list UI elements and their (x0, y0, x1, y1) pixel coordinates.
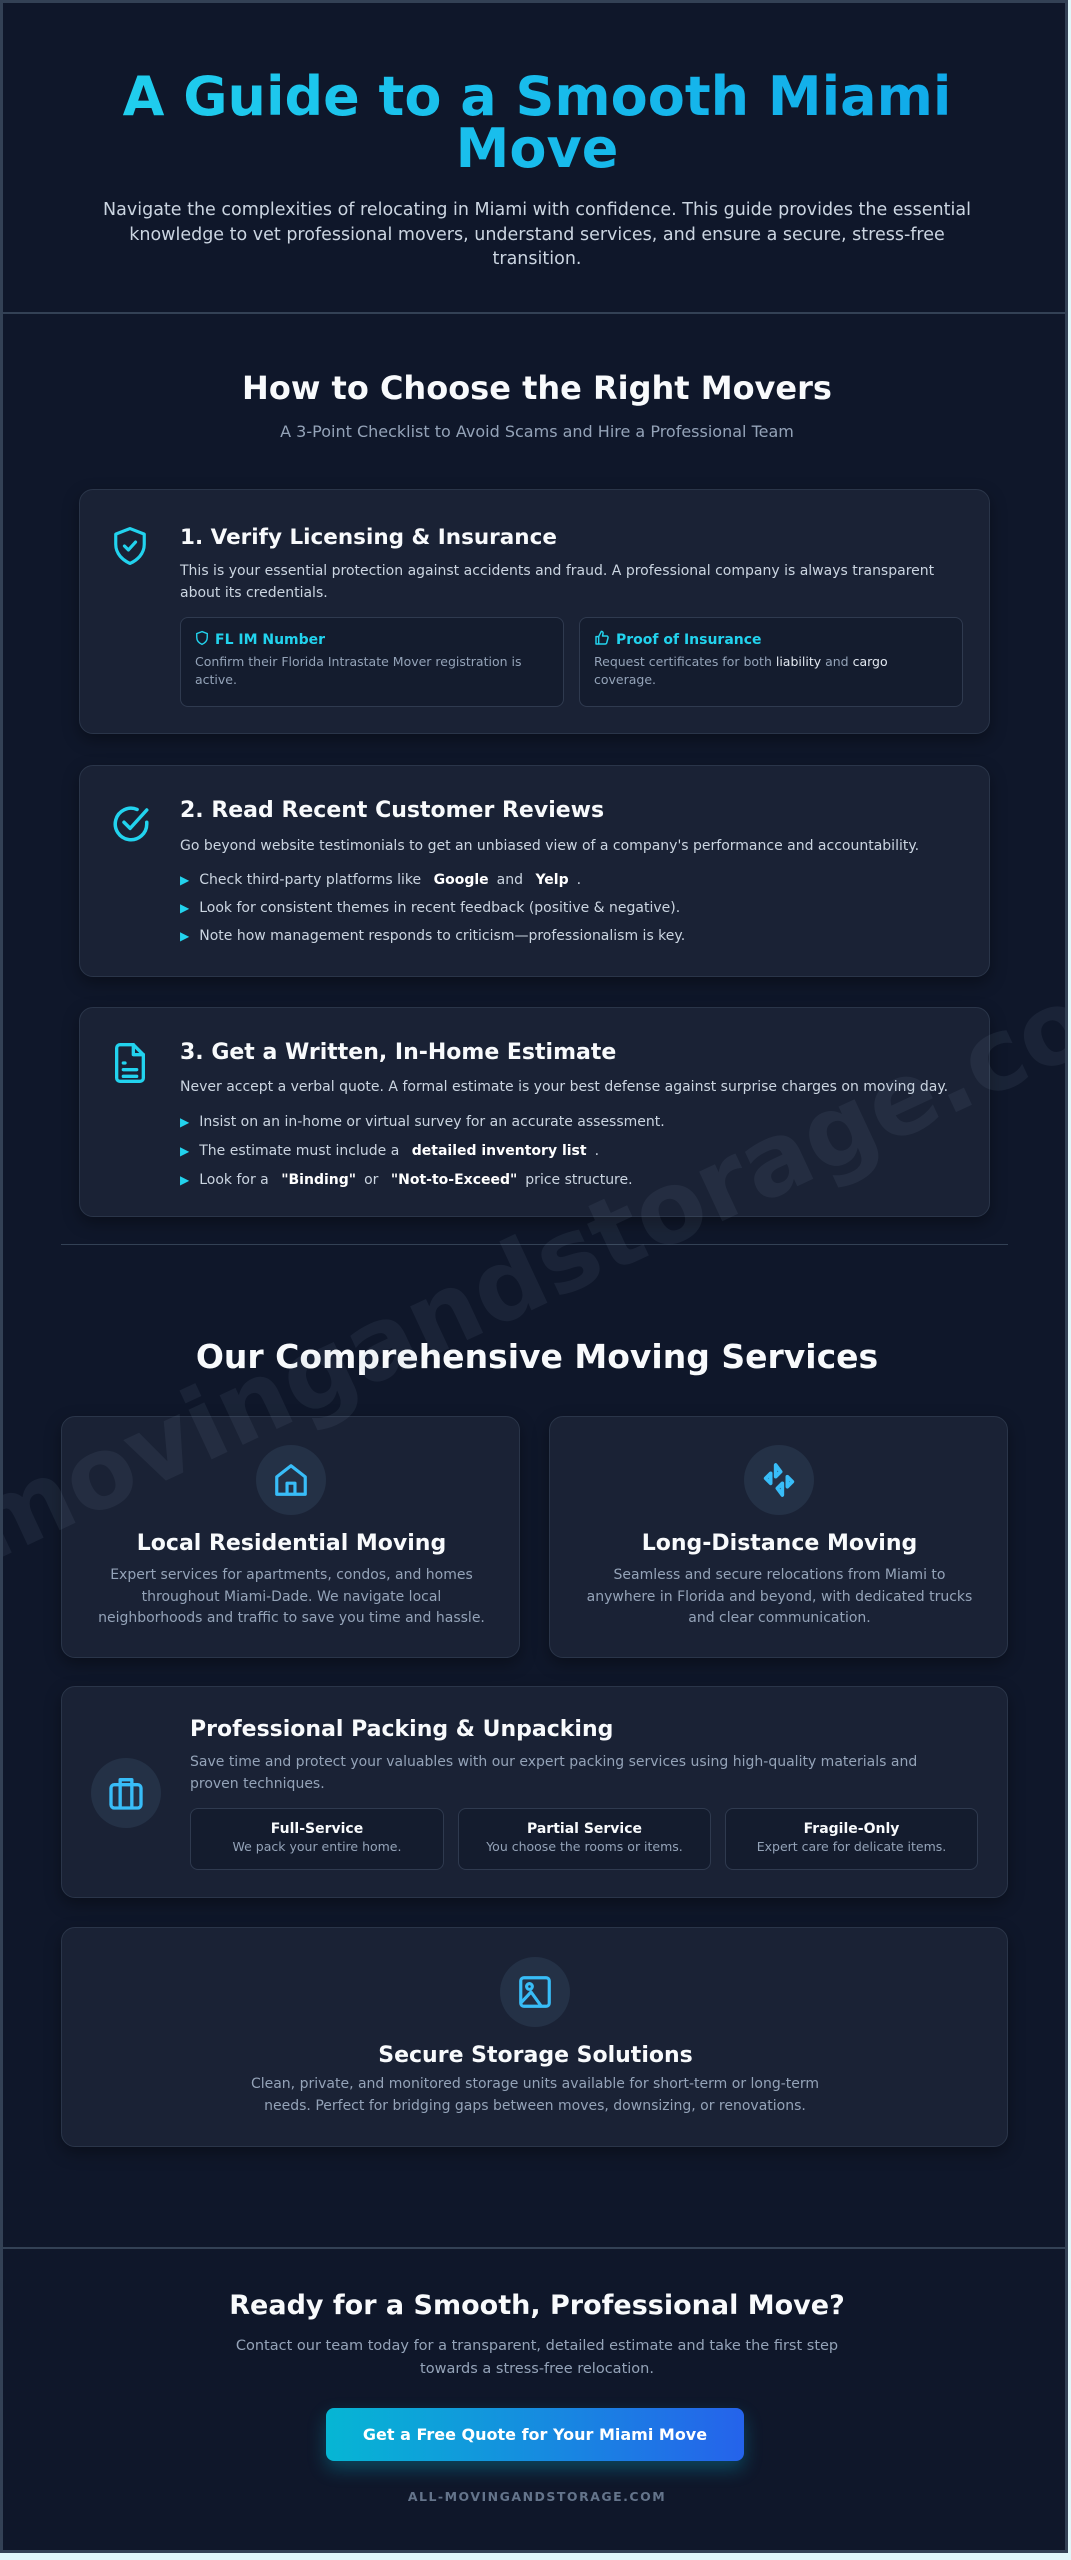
option: full-service (190, 1808, 444, 1870)
panel: step 2 reviews (79, 765, 990, 977)
footer description: Contact our team today for a transparent, detailed estimate and take the first step towards a stress-free relocation. (236, 2338, 838, 2377)
description: Go beyond website testimonials to get an unbiased view of a company's performance and accountability. (180, 838, 919, 854)
icon: document (115, 1043, 145, 1083)
description: Save time and protect your valuables with our expert packing services using high-quality materials and proven techniques. (190, 1754, 917, 1792)
bullet list (180, 1114, 665, 1188)
section subtitle: A 3-Point Checklist to Avoid Scams and Hire a Professional Team (280, 422, 794, 441)
sub-card: FL IM number: FL IM Number (215, 632, 325, 648)
description: Seamless and secure relocations from Miami to anywhere in Florida and beyond, with dedicated trucks and clear communication. (587, 1567, 972, 1626)
bullet list: ▶ The estimate must include a detailed inventory list . (180, 1143, 599, 1159)
CTA button: Get a Free Quote for Your Miami Move (363, 2425, 707, 2444)
icon: circle check (113, 806, 149, 842)
heading: 3. Get a Written, In-Home Estimate (180, 1040, 616, 1065)
header title (3, 71, 1071, 175)
panel: local residential moving (61, 1416, 520, 1658)
sub-card: proof of insurance (579, 617, 963, 707)
icon: image (500, 1957, 570, 2027)
bullet list (180, 872, 685, 944)
option: fragile-only: Fragile-Only (804, 1821, 899, 1837)
panel: long-distance moving (549, 1416, 1008, 1658)
sub-card: FL IM number: Confirm their Florida Intrastate Mover registration is active. (195, 654, 522, 687)
bullet list: ▶ Look for a "Binding" or "Not-to-Exceed" price structure. (180, 1172, 633, 1188)
bullet list: ▶ Insist on an in-home or virtual survey for an accurate assessment. (180, 1114, 665, 1130)
icon: briefcase (91, 1758, 161, 1828)
footer website: ALL-MOVINGANDSTORAGE.COM (408, 2489, 666, 2504)
option: partial service: You choose the rooms or items. (486, 1839, 683, 1854)
sub-card: FL IM number (180, 617, 564, 707)
panel: step 1 licensing (79, 489, 990, 734)
title: Secure Storage Solutions (378, 2043, 693, 2068)
panel: packing & unpacking (61, 1686, 1008, 1898)
section heading: services: Our Comprehensive Moving Services (196, 1337, 878, 1376)
description: Never accept a verbal quote. A formal estimate is your best defense against surprise charges on moving day. (180, 1079, 948, 1095)
description: Clean, private, and monitored storage units available for short-term or long-term needs. Perfect for bridging gaps between moves, downsizing, or renovations. (251, 2076, 819, 2114)
option: partial service: Partial Service (527, 1821, 642, 1837)
header title: A Guide to a Smooth Miami (123, 65, 951, 128)
icon: shield check (114, 527, 146, 565)
panel: step 3 estimate (79, 1007, 990, 1217)
header subtitle: Navigate the complexities of relocating in Miami with confidence. This guide provides the essential knowledge to vet professional movers, understand services, and ensure a secure, stress-free transition. (103, 200, 971, 269)
option: full-service: We pack your entire home. (232, 1839, 401, 1854)
sub-card: proof of insurance: Proof of Insurance (616, 632, 762, 648)
description: This is your essential protection against accidents and fraud. A professional company is always transparent about its credentials. (180, 563, 934, 601)
option: fragile-only (725, 1808, 978, 1870)
bullet list: ▶ Check third-party platforms like Google and Yelp . (180, 872, 581, 888)
CTA button (326, 2408, 744, 2461)
option: partial service (458, 1808, 711, 1870)
title: Long-Distance Moving (642, 1531, 917, 1556)
heading: 1. Verify Licensing & Insurance (180, 525, 557, 550)
icon: arrows (744, 1445, 814, 1515)
title: Professional Packing & Unpacking (190, 1717, 613, 1742)
bullet list: ▶ Note how management responds to criticism—professionalism is key. (180, 928, 685, 944)
description: Expert services for apartments, condos, and homes throughout Miami-Dade. We navigate local neighborhoods and traffic to save you time and hassle. (98, 1567, 485, 1626)
bullet list: ▶ Look for consistent themes in recent feedback (positive & negative). (180, 900, 680, 916)
option: full-service: Full-Service (271, 1821, 363, 1837)
panel: secure storage (61, 1927, 1008, 2147)
footer heading: Ready for a Smooth, Professional Move? (229, 2290, 845, 2321)
heading: 2. Read Recent Customer Reviews (180, 798, 604, 823)
sub-card: proof of insurance: Request certificates for both liability and cargo coverage. (594, 654, 888, 687)
title: Local Residential Moving (137, 1531, 446, 1556)
section heading: choose movers: How to Choose the Right Movers (242, 369, 832, 407)
icon: house (256, 1445, 326, 1515)
option: fragile-only: Expert care for delicate items. (757, 1839, 946, 1854)
header title: Move (456, 117, 618, 180)
